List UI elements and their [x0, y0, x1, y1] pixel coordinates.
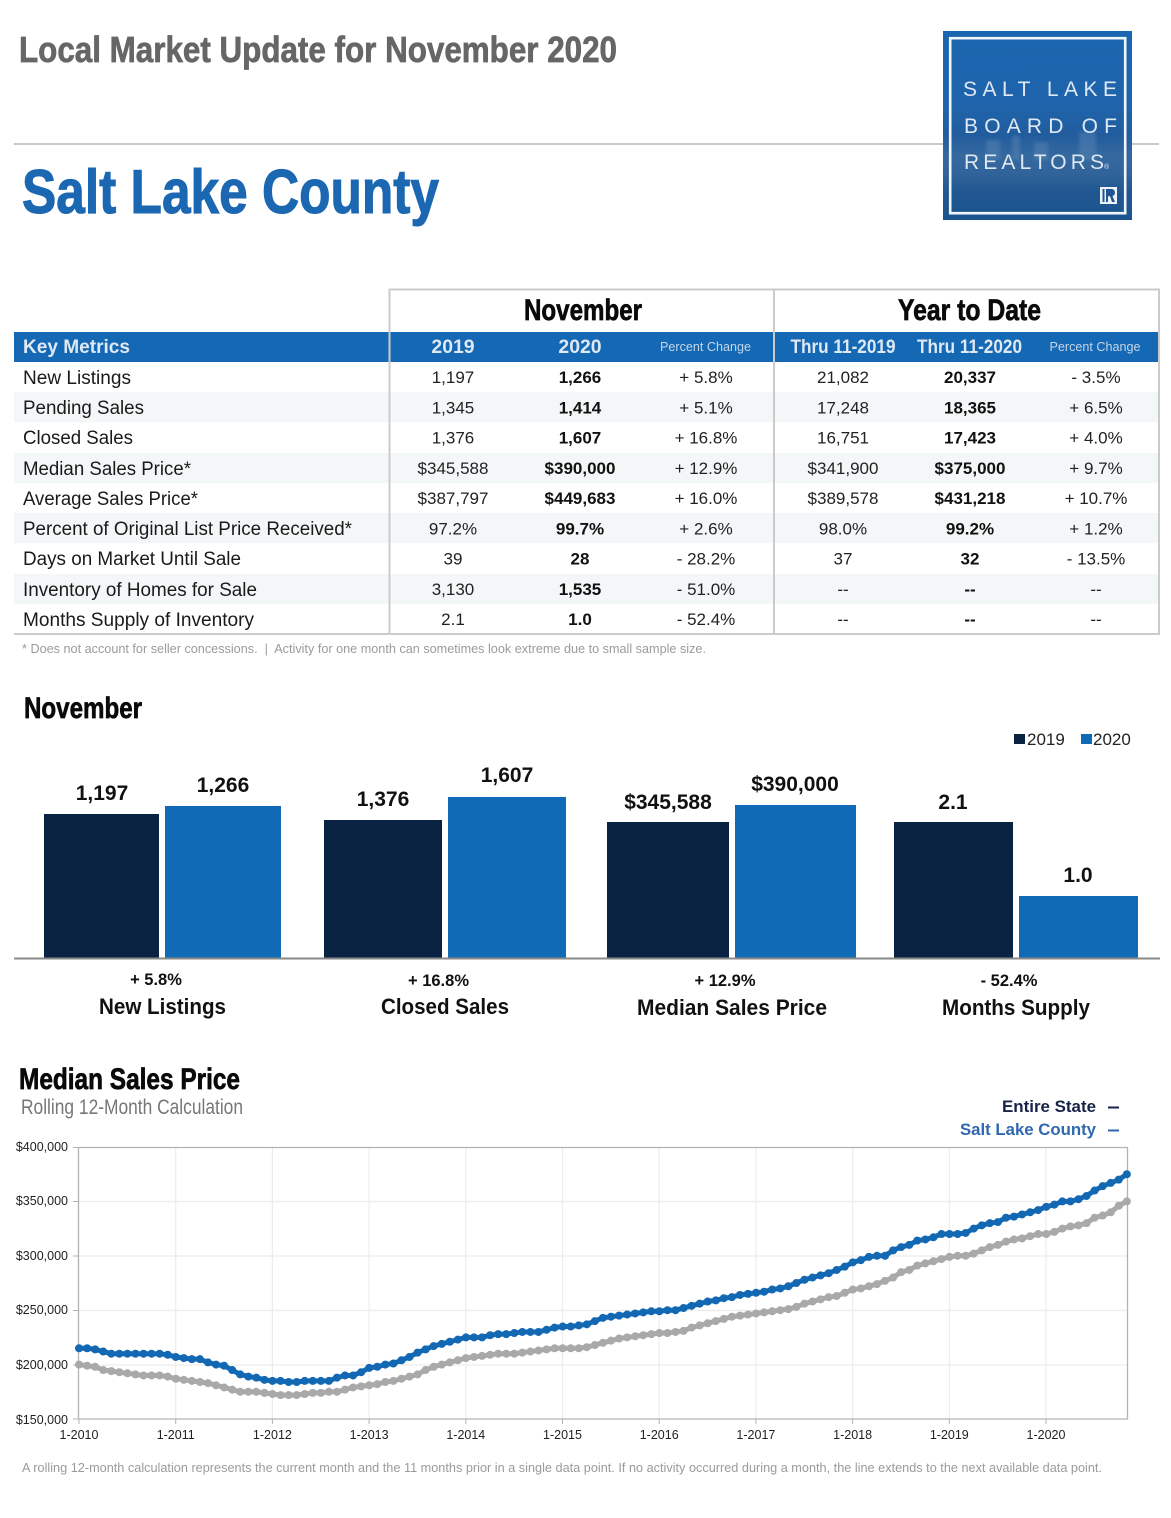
y axis labels: $250,000: [16, 1303, 68, 1317]
table header row: [14, 332, 1159, 362]
bar group: New Listings: New Listings: [99, 994, 226, 1019]
legend: bar chart years: 2019: [1027, 730, 1065, 749]
logo: Salt Lake Board of Realtors: BOARD OF: [964, 115, 1117, 138]
row: Pending Sales: 1,414: [559, 398, 602, 418]
icon: Realtor R mark: [1100, 187, 1117, 204]
x axis labels: [60, 1428, 1066, 1442]
x axis labels: 1-2013: [350, 1428, 389, 1442]
table header row: Key Metrics: [23, 336, 130, 358]
heading: Median Sales Price: Median Sales Price: [19, 1063, 240, 1096]
row: Average Sales Price: + 10.7%: [1065, 489, 1127, 508]
y axis labels: $400,000: [16, 1140, 68, 1154]
row: New Listings: + 5.8%: [679, 368, 733, 387]
row: Months Supply of Inventory: 2.1: [441, 610, 465, 629]
x axis labels: 1-2017: [736, 1428, 775, 1442]
table column heading: November: November: [524, 294, 642, 327]
row: Median Sales Price: $345,588: [418, 459, 488, 478]
x axis labels: 1-2014: [446, 1428, 485, 1442]
row: Pending Sales: 18,365: [944, 398, 996, 418]
bar group: Closed Sales: + 16.8%: [408, 972, 469, 990]
table header row: Percent Change: [1050, 339, 1140, 354]
x axis labels: 1-2011: [157, 1428, 195, 1442]
row: Percent of Original List Price Received: Percent of Original List Price Received*: [23, 519, 353, 540]
legend: bar chart years: 2020: [1093, 730, 1131, 749]
row: Inventory of Homes for Sale: Inventory of Homes for Sale: [23, 580, 257, 601]
legend: line chart: Entire State: [1002, 1097, 1096, 1116]
row: New Listings: 21,082: [817, 368, 869, 387]
row: Inventory of Homes for Sale: --: [837, 580, 849, 599]
row: Closed Sales: + 4.0%: [1069, 428, 1123, 448]
row: New Listings: [23, 368, 1121, 389]
row: Pending Sales: 17,248: [817, 398, 869, 418]
bar group: Median Sales Price: [607, 773, 856, 1020]
row: New Listings: - 3.5%: [1071, 368, 1121, 387]
row: New Listings: 1,197: [432, 368, 474, 387]
row: Pending Sales: 1,345: [432, 398, 474, 418]
bar group: New Listings: [44, 774, 281, 1019]
row: Pending Sales: + 6.5%: [1069, 398, 1123, 418]
row: Average Sales Price: Average Sales Price*: [23, 489, 199, 510]
row: Inventory of Homes for Sale: 1,535: [559, 580, 601, 599]
row: Inventory of Homes for Sale: --: [1090, 580, 1102, 599]
alternating row shading: [14, 392, 1159, 604]
row: Days on Market Until Sale: 28: [571, 550, 589, 568]
row: Months Supply of Inventory: [23, 610, 1102, 631]
row: Closed Sales: 1,607: [559, 428, 601, 448]
bar group: Months Supply: - 52.4%: [981, 972, 1038, 990]
row: Closed Sales: 16,751: [817, 428, 869, 448]
bar group: Months Supply: [894, 791, 1138, 1020]
legend: line chart: Salt Lake County: [960, 1120, 1097, 1139]
row: Median Sales Price: [23, 459, 1123, 480]
footnote: * Does not account for seller concessions. | Activity for one month can sometimes look extreme due to small sample size.: [22, 642, 706, 656]
x axis labels: 1-2016: [640, 1428, 679, 1442]
logo: Salt Lake Board of Realtors: SALT LAKE: [963, 78, 1117, 101]
table: key metrics: [14, 290, 1159, 634]
bar group: Median Sales Price: + 12.9%: [694, 972, 756, 990]
row: Months Supply of Inventory: 1.0: [568, 610, 592, 629]
x axis labels: 1-2019: [930, 1428, 969, 1442]
row: Closed Sales: + 16.8%: [675, 428, 737, 448]
subheading: Rolling 12-Month Calculation: Rolling 12-Month Calculation: [21, 1096, 243, 1119]
data line: Entire State (gray): [79, 1201, 1127, 1395]
bar group: Median Sales Price: $390,000: [751, 773, 839, 796]
table header row: 2020: [558, 336, 602, 358]
bar group: Closed Sales: [324, 764, 566, 1019]
row: Months Supply of Inventory: --: [964, 610, 976, 629]
x axis labels: 1-2015: [543, 1428, 582, 1442]
bar group: Closed Sales: 1,376: [357, 788, 409, 811]
row: Percent of Original List Price Received: + 1.2%: [1069, 520, 1123, 538]
row: Days on Market Until Sale: [23, 549, 1125, 570]
row: Closed Sales: Closed Sales: [23, 428, 133, 449]
row: New Listings: New Listings: [23, 368, 131, 389]
row: Percent of Original List Price Received: [23, 519, 1123, 540]
x axis labels: 1-2010: [60, 1428, 99, 1442]
bar group: Closed Sales: Closed Sales: [381, 994, 509, 1019]
x axis labels: 1-2018: [833, 1428, 872, 1442]
bar group: Median Sales Price: Median Sales Price: [637, 995, 827, 1020]
bar group: New Listings: + 5.8%: [130, 971, 182, 989]
legend: bar chart years: [1014, 730, 1131, 749]
row: Percent of Original List Price Received: 99.7%: [556, 520, 604, 538]
row: Percent of Original List Price Received: 99.2%: [946, 520, 994, 538]
row: Median Sales Price: + 12.9%: [675, 459, 737, 478]
x axis labels: 1-2020: [1027, 1428, 1066, 1442]
table header row: 2019: [431, 336, 475, 358]
bar group: Closed Sales: 1,607: [481, 764, 533, 787]
data line: Salt Lake County (blue): [79, 1174, 1127, 1382]
row: Pending Sales: [23, 398, 1123, 419]
row: Median Sales Price: $375,000: [935, 459, 1005, 478]
row: Average Sales Price: $387,797: [418, 489, 488, 508]
bar group: Months Supply: 1.0: [1063, 864, 1093, 887]
row: Inventory of Homes for Sale: 3,130: [432, 580, 474, 599]
y axis labels: [16, 1140, 68, 1427]
bar group: New Listings: 1,266: [197, 774, 249, 797]
row: Inventory of Homes for Sale: - 51.0%: [677, 580, 735, 599]
row: Closed Sales: 1,376: [432, 428, 474, 448]
row: Inventory of Homes for Sale: [23, 580, 1102, 601]
row: Average Sales Price: $449,683: [545, 489, 615, 508]
table column heading: Year to Date: Year to Date: [898, 294, 1041, 327]
row: Closed Sales: 17,423: [944, 428, 996, 448]
x axis labels: 1-2012: [253, 1428, 292, 1442]
row: Closed Sales: [23, 428, 1123, 449]
row: Median Sales Price: $390,000: [545, 459, 615, 478]
y axis labels: $300,000: [16, 1249, 68, 1263]
y axis labels: $150,000: [16, 1413, 68, 1427]
row: Months Supply of Inventory: --: [837, 610, 849, 629]
row: Days on Market Until Sale: 37: [834, 550, 852, 568]
row: New Listings: 20,337: [944, 368, 996, 387]
chart footnote: A rolling 12-month calculation represents the current month and the 11 months prior in a single data point. If no activity occurred during a month, the line extends to the next available data point.: [22, 1460, 1102, 1475]
bar group: Months Supply: Months Supply: [942, 995, 1091, 1020]
row: Days on Market Until Sale: Days on Market Until Sale: [23, 549, 241, 570]
row: Months Supply of Inventory: Months Supply of Inventory: [23, 610, 254, 631]
row: Days on Market Until Sale: - 13.5%: [1067, 550, 1125, 568]
logo: Salt Lake Board of Realtors: ®: [1104, 163, 1110, 171]
row: Months Supply of Inventory: --: [1090, 610, 1102, 629]
logo: Salt Lake Board of Realtors: [943, 31, 1132, 220]
row: Percent of Original List Price Received: + 2.6%: [679, 520, 733, 538]
row: Average Sales Price: [23, 489, 1127, 510]
row: Days on Market Until Sale: - 28.2%: [677, 550, 735, 568]
legend: line chart: [960, 1097, 1119, 1139]
row: Months Supply of Inventory: - 52.4%: [677, 610, 735, 629]
heading: November: November: [24, 692, 142, 725]
bar group: New Listings: 1,197: [76, 782, 128, 805]
table header row: Percent Change: [660, 339, 751, 354]
row: Days on Market Until Sale: 39: [444, 550, 462, 568]
row: Inventory of Homes for Sale: --: [964, 580, 976, 599]
heading: Salt Lake County: Salt Lake County: [22, 158, 439, 227]
table header row: Thru 11-2020: [917, 336, 1022, 358]
row: New Listings: 1,266: [559, 368, 601, 387]
y axis labels: $350,000: [16, 1194, 68, 1208]
row: Pending Sales: + 5.1%: [679, 398, 733, 418]
row: Median Sales Price: + 9.7%: [1069, 459, 1123, 478]
row: Pending Sales: Pending Sales: [23, 398, 144, 419]
line chart: median sales price rolling 12-month: [16, 1140, 1128, 1442]
title: Local Market Update: Local Market Update for November 2020: [19, 29, 617, 70]
bar chart: November comparison: [14, 764, 1160, 1020]
row: Days on Market Until Sale: 32: [961, 550, 979, 568]
row: Average Sales Price: + 16.0%: [675, 489, 737, 508]
table header row: Thru 11-2019: [790, 336, 896, 358]
row: Percent of Original List Price Received: 97.2%: [429, 520, 477, 538]
bar group: Months Supply: 2.1: [938, 791, 968, 814]
row: Median Sales Price: Median Sales Price*: [23, 459, 192, 480]
bar group: Median Sales Price: $345,588: [624, 791, 712, 814]
logo: Salt Lake Board of Realtors: REALTORS: [964, 151, 1104, 174]
row: Median Sales Price: $341,900: [808, 459, 878, 478]
row: Percent of Original List Price Received: 98.0%: [819, 520, 867, 538]
y axis labels: $200,000: [16, 1358, 68, 1372]
row: Average Sales Price: $431,218: [935, 489, 1005, 508]
row: Average Sales Price: $389,578: [808, 489, 878, 508]
